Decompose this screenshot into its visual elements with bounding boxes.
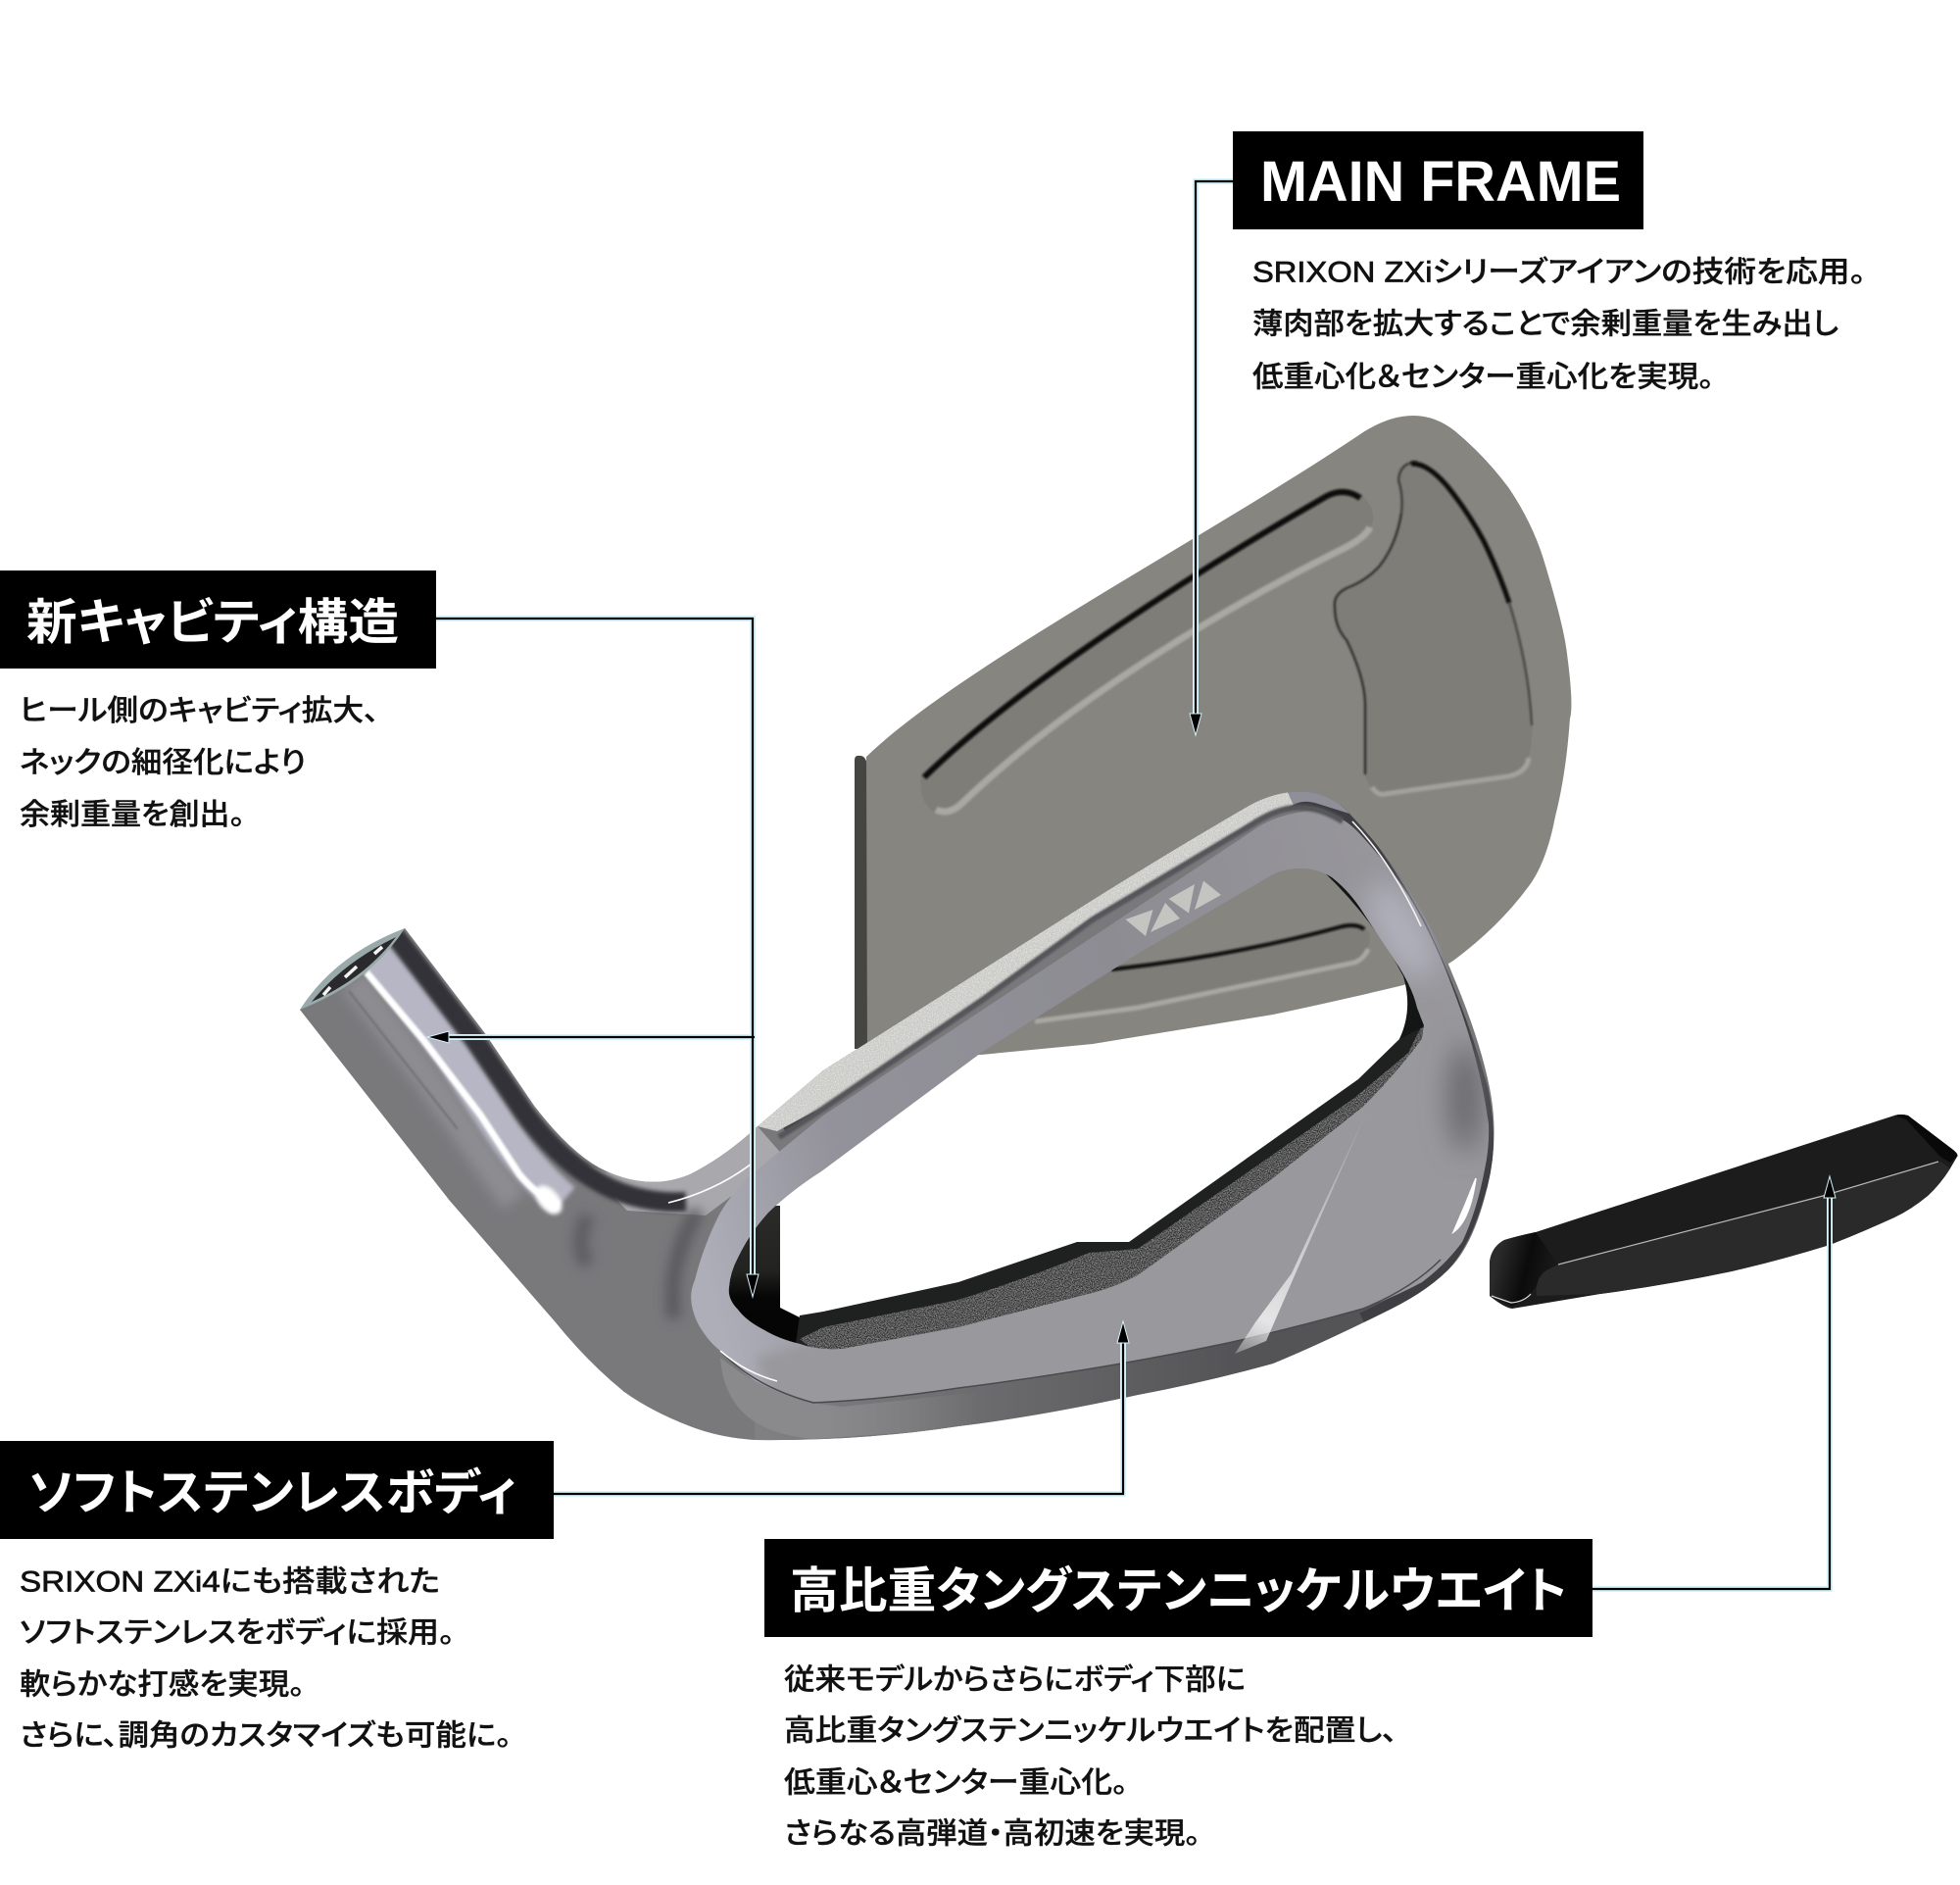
lower cavity slot [1035, 924, 1370, 1021]
textured top line strip [758, 790, 1294, 1131]
panel: main frame [1233, 131, 1866, 394]
club face [691, 810, 1489, 1402]
text: new cavity description: ヒール側のキャビティ拡大、 [20, 695, 379, 727]
text: new cavity description: ネックの細径化により [20, 747, 306, 779]
leader: tungsten weight [1592, 1176, 1836, 1589]
text: tungsten description [784, 1664, 1397, 1851]
heading: tungsten nickel weight: 高比重タングステンニッケルウエイト [790, 1563, 1567, 1618]
text: tungsten description: 高比重タングステンニッケルウエイトを配置し、 [784, 1715, 1397, 1747]
panel: soft stainless body [0, 1441, 554, 1753]
upper rim highlight [1352, 821, 1421, 926]
text: soft stainless description: さらに、調角のカスタマイズも可能に。 [20, 1719, 512, 1753]
text: main frame description: 薄肉部を拡大することで余剰重量を生み出し [1252, 308, 1838, 341]
bend highlight [533, 1183, 564, 1217]
arrowhead: cavity down [747, 1274, 759, 1297]
logo triangles [1125, 880, 1221, 936]
black heel corner [686, 1206, 882, 1358]
neck light area [578, 1126, 784, 1215]
text: main frame description [1252, 257, 1866, 394]
heading: new cavity: 新キャビティ構造 [26, 595, 399, 650]
long cavity slot [920, 489, 1373, 813]
leader: soft stainless body [554, 1321, 1129, 1494]
heel end cap [1490, 1232, 1558, 1307]
arrowhead: body up [1117, 1321, 1129, 1343]
arrowhead: main frame [1190, 714, 1201, 735]
hosel lit band [373, 952, 564, 1201]
dark shading on toe [1447, 1044, 1483, 1152]
weight lower edge highlight [1492, 1294, 1531, 1303]
sole zone [755, 1274, 1444, 1441]
lower face of weight [1537, 1162, 1950, 1296]
face bevel line [720, 1260, 1441, 1403]
top right satin end [1287, 790, 1349, 814]
hosel faint crease [349, 991, 458, 1129]
panel: new cavity structure [0, 570, 436, 831]
stippled band [800, 1025, 1431, 1358]
lower face panel [757, 1015, 1481, 1402]
hosel highlight [363, 969, 539, 1197]
light shading on upper toe [1354, 872, 1448, 990]
heading: main frame: MAIN FRAME [1260, 150, 1621, 214]
illustration: main frame plate [855, 416, 1571, 1059]
hosel dark band [395, 935, 686, 1202]
illustration: rear dark area seen through club opening [686, 867, 1431, 1358]
text: tungsten description: さらなる高弾道・高初速を実現。 [784, 1817, 1200, 1851]
leader: main frame [1190, 181, 1233, 735]
frame plate body [866, 416, 1571, 1059]
panel: tungsten nickel weight [764, 1539, 1592, 1851]
toe cavity pocket [1335, 462, 1533, 794]
neck thin highlight [668, 1164, 752, 1203]
text: tungsten description: 従来モデルからさらにボディ下部に [784, 1664, 1246, 1696]
illustration: tungsten weight [1490, 1115, 1958, 1309]
leader: new cavity [427, 619, 759, 1297]
illustration: club head body [284, 774, 1509, 1461]
top line groove [779, 808, 1343, 1137]
hosel left sheen [353, 980, 514, 1201]
toe crescent highlight [1453, 1178, 1476, 1232]
heading: soft stainless body [0, 1441, 554, 1539]
text: soft stainless description [20, 1566, 512, 1753]
weight edge highlight [1558, 1162, 1938, 1265]
outer rim dark [784, 801, 1488, 1318]
translucent heel overlay [720, 1358, 930, 1439]
text: new cavity description: 余剰重量を創出。 [20, 799, 245, 831]
heading: main frame [1233, 131, 1643, 229]
heading: tungsten nickel weight [764, 1539, 1592, 1637]
illustration: hosel bore [300, 928, 405, 1010]
heel thin highlight [720, 1351, 777, 1381]
frame left edge [855, 756, 867, 1049]
text: soft stainless description: SRIXON ZXi4 にも搭載された [20, 1566, 440, 1598]
heading: new cavity [0, 570, 436, 669]
weight body [1490, 1115, 1958, 1309]
text: new cavity description [20, 695, 379, 831]
arrowhead: weight up [1824, 1176, 1836, 1198]
text: main frame description: 低重心化＆センター重心化を実現。 [1252, 361, 1714, 394]
toe end cap [1894, 1115, 1958, 1163]
text: soft stainless description: ソフトステンレスをボディに採用。 [20, 1617, 455, 1649]
arrowhead: hosel left [427, 1031, 449, 1043]
heel dark shading [672, 1211, 698, 1318]
dark upper band [794, 1019, 1426, 1358]
hosel edge light [405, 928, 607, 1171]
toe inner crescent [1318, 867, 1427, 1039]
text: tungsten description: 低重心＆センター重心化。 [784, 1766, 1128, 1800]
text: main frame description: SRIXON ZXi シリーズアイアンの技術を応用。 [1252, 257, 1866, 288]
text: soft stainless description: 軟らかな打感を実現。 [20, 1668, 305, 1702]
heading: soft stainless body: ソフトステンレスボディ [28, 1465, 516, 1520]
toe streak highlight [1235, 1122, 1362, 1354]
base silhouette [300, 811, 1494, 1441]
bend dark shading [580, 1215, 588, 1265]
